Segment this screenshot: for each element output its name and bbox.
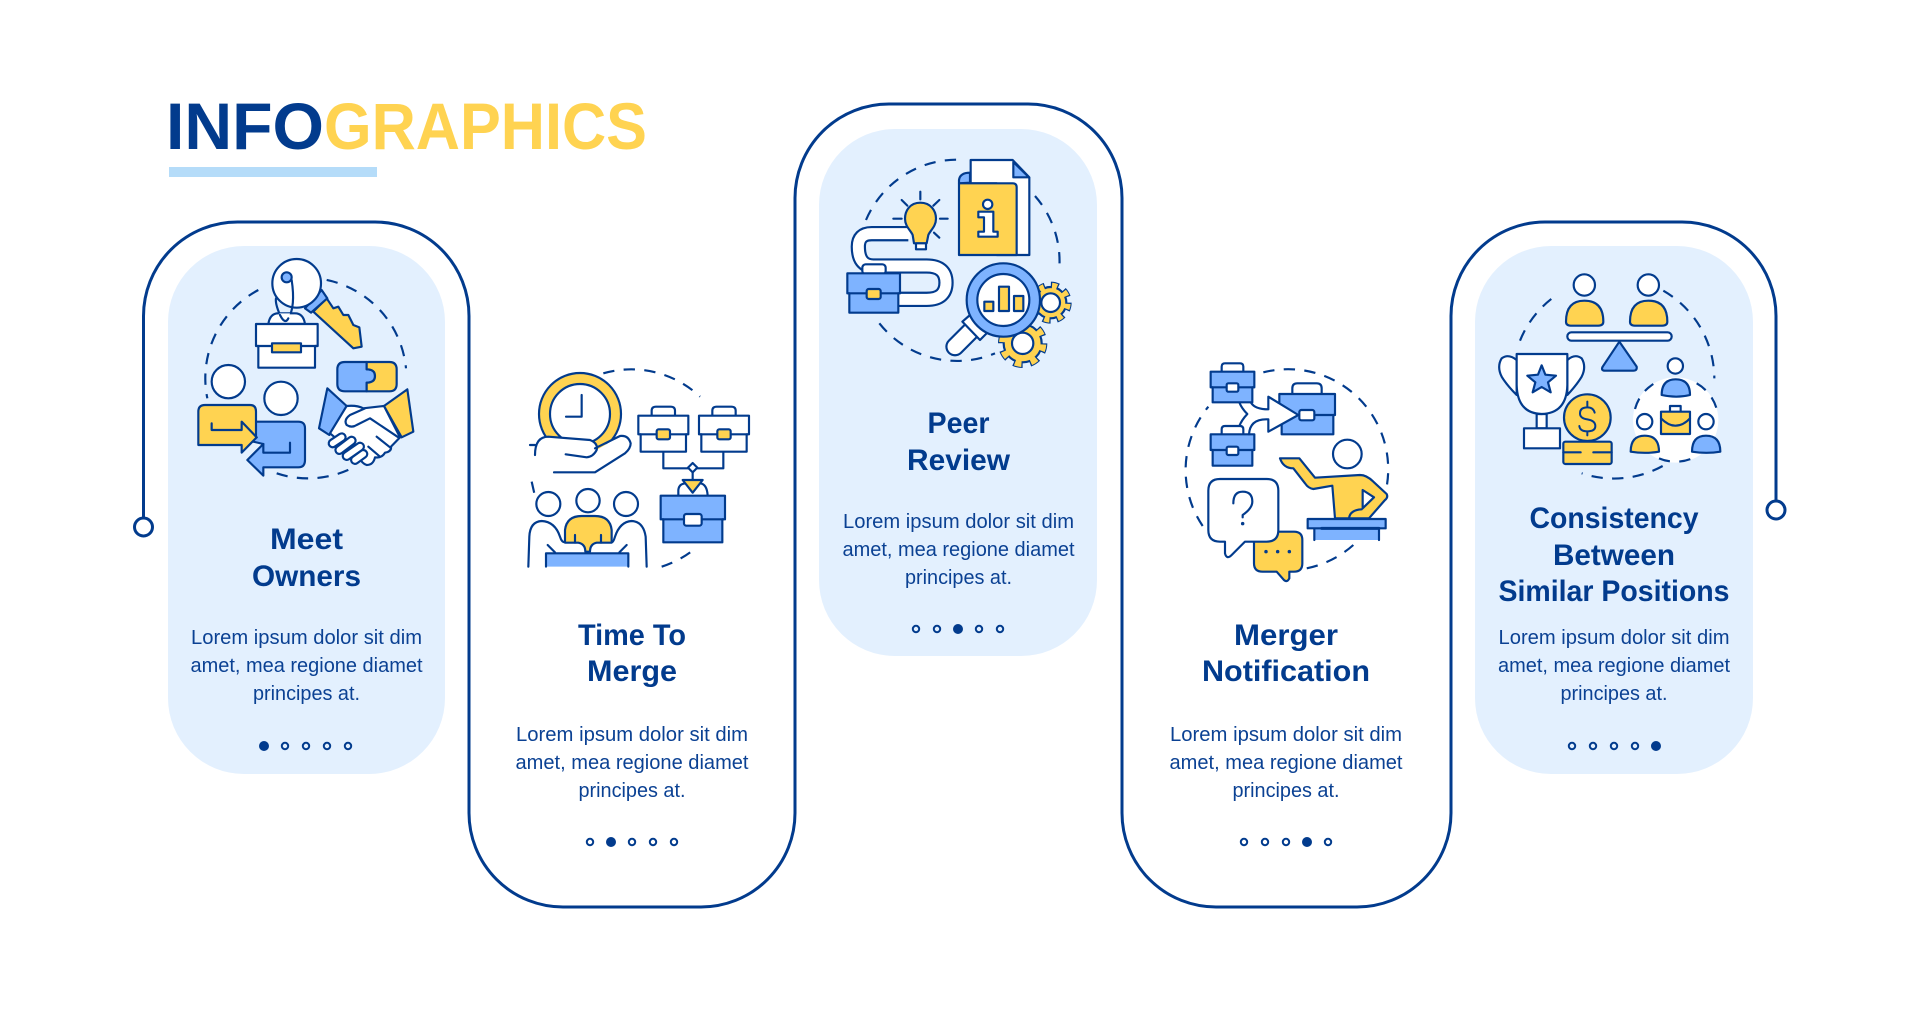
pagination dots xyxy=(260,742,351,750)
body text: Lorem ipsum dolor sit dim xyxy=(191,627,422,649)
heading: Similar Positions xyxy=(1498,575,1730,608)
body text: Lorem ipsum dolor sit dim xyxy=(1498,627,1730,649)
panel: merger notification xyxy=(1170,363,1403,846)
heading xyxy=(578,619,686,688)
heading: Merge xyxy=(587,655,677,688)
body text xyxy=(1498,627,1730,705)
body text: principes at. xyxy=(905,567,1012,589)
heading xyxy=(252,523,361,593)
pagination dots xyxy=(1241,838,1331,846)
body text: principes at. xyxy=(253,683,360,705)
icon: info folder, path, bulb and magnifier xyxy=(847,160,1067,363)
pagination dots xyxy=(913,625,1003,633)
body text xyxy=(516,724,749,802)
heading: Consistency xyxy=(1530,502,1699,535)
icon: clock, briefcases and meeting xyxy=(528,369,749,567)
body text xyxy=(842,511,1075,589)
body text: principes at. xyxy=(1560,683,1668,705)
body text: Lorem ipsum dolor sit dim xyxy=(1170,724,1402,746)
panel: time to merge xyxy=(516,369,749,846)
body text: Lorem ipsum dolor sit dim xyxy=(516,724,748,746)
heading: Time To xyxy=(578,619,686,652)
title underline xyxy=(169,167,377,177)
panel: meet owners xyxy=(168,246,445,774)
panel: consistency between similar positions xyxy=(1475,246,1753,774)
pagination dots xyxy=(1569,742,1660,750)
heading: Meet xyxy=(270,523,343,556)
heading: Notification xyxy=(1202,655,1370,688)
pagination dots xyxy=(587,838,677,846)
body text: Lorem ipsum dolor sit dim xyxy=(843,511,1074,533)
icon: key, briefcase, people and handshake xyxy=(198,259,413,478)
heading: Review xyxy=(907,444,1010,477)
panel: peer review xyxy=(819,129,1097,656)
heading: Owners xyxy=(252,560,361,593)
heading xyxy=(1498,502,1730,608)
connecting timeline outline xyxy=(134,104,1785,907)
title xyxy=(166,89,647,163)
icon: merging briefcases, speaker and speech bubbles xyxy=(1186,363,1388,581)
body text: principes at. xyxy=(578,780,686,802)
body text: amet, mea regione diamet xyxy=(842,539,1075,561)
heading: Peer xyxy=(928,407,990,440)
title: GRAPHICS xyxy=(324,89,647,163)
body text: amet, mea regione diamet xyxy=(1498,655,1730,677)
body text: amet, mea regione diamet xyxy=(1170,752,1403,774)
body text xyxy=(1170,724,1403,802)
body text: principes at. xyxy=(1232,780,1340,802)
icon: balance, trophy, coin and team xyxy=(1499,274,1720,479)
body text: amet, mea regione diamet xyxy=(190,655,423,677)
title: INFO xyxy=(166,89,324,163)
heading xyxy=(1202,619,1370,688)
heading: Between xyxy=(1553,539,1675,572)
heading: Merger xyxy=(1234,619,1339,652)
heading xyxy=(907,407,1010,477)
body text xyxy=(190,627,423,705)
body text: amet, mea regione diamet xyxy=(516,752,749,774)
